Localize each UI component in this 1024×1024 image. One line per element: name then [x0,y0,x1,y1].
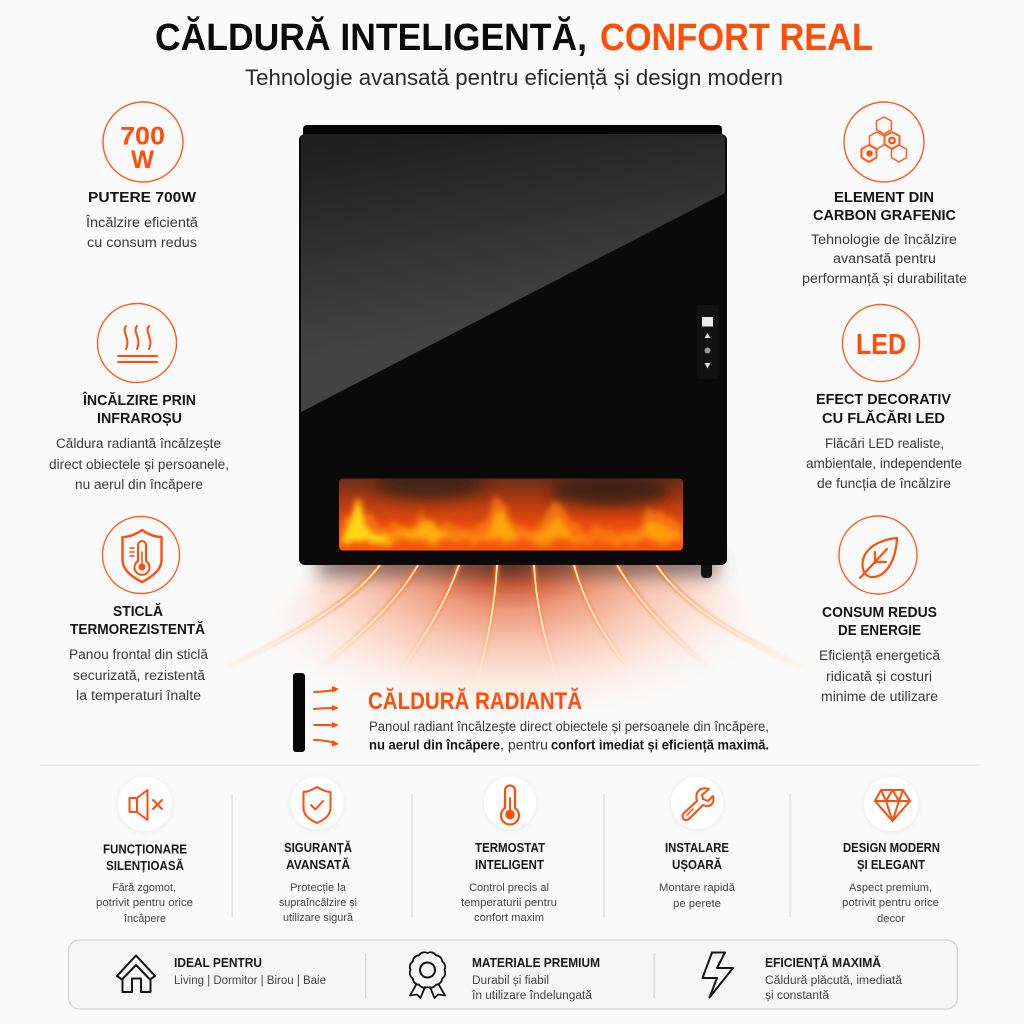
heading: SILENȚIOASĂ [106,858,184,873]
description [461,882,557,924]
feature: infrared heating [49,304,229,492]
description: utilizare sigură [283,912,354,924]
icon: wrench [671,777,723,829]
heading: ȘI ELEGANT [857,858,925,872]
description: Eficiență energetică [819,648,940,663]
icon: muted speaker [118,777,172,831]
feature: graphene carbon element [802,102,967,286]
icon: shield check [290,776,344,830]
description: securizată, rezistentă [73,668,206,683]
icon: LED [842,304,920,382]
icon: 700 W: 700 [120,122,165,150]
heading: TERMOSTAT [475,841,545,855]
description: Panou frontal din sticlă [69,647,208,662]
icon: LED: LED [856,329,906,361]
heading: SIGURANȚĂ [284,840,352,855]
title: CĂLDURĂ INTELIGENTĂ, [155,15,587,59]
icon: side-view panel with arrows [293,673,339,752]
text [174,956,326,987]
flame window [339,478,683,550]
bottom summary panel [68,940,958,1009]
description: confort imediat și eficiență maximă. [551,738,769,752]
description: potrivit pentru orice [842,897,939,909]
heading: DE ENERGIE [838,623,921,639]
benefit: advanced safety [279,776,357,924]
heading: INTELIGENT [475,858,544,872]
heading: UȘOARĂ [672,857,722,872]
heading [813,190,957,224]
description [369,719,769,752]
description: supraîncălzire și [279,897,357,909]
subtitle: Tehnologie avansată pentru eficiență și design modern [245,65,783,90]
glass reflection [301,134,725,412]
heading [70,603,205,638]
description: Căldura radiantă încălzește [56,436,221,451]
heading [843,841,940,872]
heading: INSTALARE [665,841,729,855]
radiant heat rays [228,565,813,682]
title [155,15,873,59]
heading: FUNCȚIONARE [103,842,187,856]
description: Panoul radiant încălzește direct obiectele și persoanele din încăpere, [369,719,769,734]
description: Aspect premium, [849,882,932,894]
icon: leaf [839,516,917,594]
description: Fără zgomot, [112,882,176,894]
heading: PUTERE 700W [88,190,196,206]
description: Montare rapidă [659,882,736,894]
text: în utilizare îndelungată [471,990,593,1002]
description: performanță și durabilitate [802,271,967,286]
description: confort maxim [474,912,544,924]
heading: ELEMENT DIN [834,190,934,206]
description [69,647,208,703]
description [842,882,939,925]
text [765,955,903,1002]
text: și constantă [765,990,830,1002]
description: temperaturii pentru [461,897,557,909]
description [96,882,193,925]
heater body [299,134,727,565]
description: Încălzire eficientă [85,215,199,230]
icon: lightning bolt [702,952,733,998]
description: potrivit pentru orice [96,897,193,909]
heading [103,842,187,873]
benefit: easy installation [659,777,736,910]
heading [475,841,545,872]
description [659,882,736,910]
heading [665,841,729,872]
heading: AVANSATĂ [286,857,350,872]
feature: low energy consumption [819,516,940,704]
icon: rosette [410,952,445,998]
heater foot [701,560,712,578]
radiant heat callout [293,673,769,752]
description: nu aerul din încăpere [369,738,500,752]
heading: TERMOREZISTENTĂ [70,621,205,638]
description: ridicată și costuri [826,669,932,684]
icon: heat waves [98,304,176,382]
icon: diamond [864,777,918,831]
description: încăpere [123,913,166,925]
heading: INFRAROȘU [97,411,182,427]
heading [284,840,352,872]
panel background [68,940,958,1009]
ideal for [117,956,326,992]
description [49,436,229,492]
icon: hexagons [844,102,924,182]
description: cu consum redus [87,235,197,250]
feature: LED flame effect [806,304,962,491]
heat glow under the heater [190,540,830,725]
heading: DESIGN MODERN [843,841,940,855]
description: ambientale, independente [806,456,962,471]
icon: 700 W: W [131,146,154,174]
description: Protecție la [290,882,347,894]
heading: CONSUM REDUS [822,605,937,621]
description: avansată pentru [833,251,936,266]
description [806,436,962,491]
maximum efficiency [702,952,903,1002]
description: , pentru [500,738,548,752]
heater product [299,125,727,578]
icon: thermometer [484,777,536,829]
description: la temperaturi înalte [76,688,201,703]
description [802,232,967,286]
heading: ÎNCĂLZIRE PRIN [82,391,196,409]
feature: heat-resistant glass [69,516,208,703]
description: pe perete [673,898,721,910]
description: decor [877,913,905,925]
description: nu aerul din încăpere [75,477,203,492]
heading [822,605,937,639]
description: Flăcări LED realiste, [825,436,944,451]
description: de funcția de încălzire [817,476,951,491]
heading [816,392,951,427]
description [85,215,199,250]
premium materials [410,952,600,1002]
heading [82,391,196,427]
text: Living | Dormitor | Birou | Baie [174,975,326,987]
description: direct obiectele și persoanele, [49,457,229,472]
description: minime de utilizare [821,689,938,704]
text [471,956,600,1002]
icon: shield thermometer [102,516,180,594]
description: Tehnologie de încălzire [811,232,957,247]
benefit: smart thermostat [461,777,557,924]
benefit: silent operation [96,777,193,925]
heading: CU FLĂCĂRI LED [822,410,945,427]
description: Control precis al [469,882,549,894]
text: MATERIALE PREMIUM [472,956,600,970]
heading: CĂLDURĂ RADIANTĂ [368,687,582,715]
heading: STICLĂ [113,603,164,620]
text: Durabil și fiabil [472,975,549,987]
benefit: modern design [842,777,940,925]
text: Căldură plăcută, imediată [765,975,903,987]
heading: CARBON GRAFENIC [813,208,957,224]
icon: 700 W [103,102,183,182]
control panel [697,305,718,379]
icon: house [117,956,155,992]
text: EFICIENȚĂ MAXIMĂ [765,955,881,970]
heater top edge [303,125,722,139]
title: CONFORT REAL [600,17,873,59]
heading: EFECT DECORATIV [816,392,951,408]
feature: 700 W power [85,102,199,250]
text: IDEAL PENTRU [174,956,262,970]
description [279,882,357,924]
description [819,648,940,704]
